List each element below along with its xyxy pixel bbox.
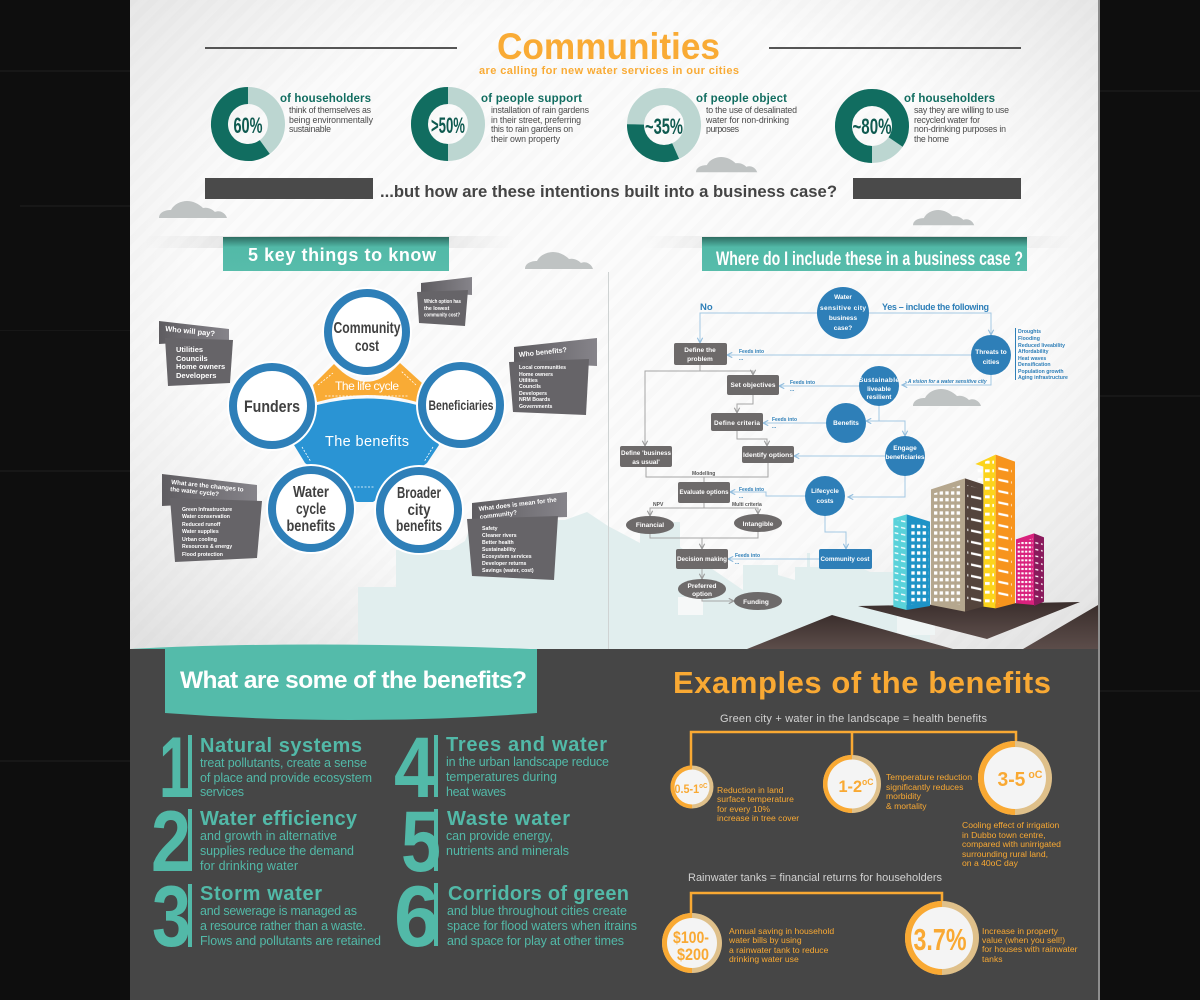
node: water cycle benefits: cycle [296, 501, 326, 518]
benefit 6: corridors of green: space for flood waters when itrains [447, 919, 637, 933]
ellipse: funding [734, 592, 782, 610]
benefit 5: waste water: can provide energy, [446, 829, 553, 843]
example: 1-2oC: & mortality [886, 801, 927, 811]
ellipse: funding: Funding [743, 599, 769, 606]
example: $100-$200: water bills by using [728, 935, 802, 945]
box: community cost [819, 549, 872, 569]
example: $100-$200: a rainwater tank to reduce [729, 945, 829, 955]
heading: examples of the benefits: Examples of the benefits [673, 665, 1051, 700]
heading: 5 key things to know [145, 236, 515, 271]
box: define criteria [711, 413, 763, 431]
stat: 60% of householders: sustainable [289, 124, 331, 134]
callout: which option [417, 277, 472, 326]
benefit 2: water efficiency: and growth in alternative [200, 829, 337, 843]
example: 0.5-1oC: surface temperature [717, 794, 794, 804]
box: evaluate options: Evaluate options [680, 489, 729, 496]
stat: ~80% of householders: say they are willing to use [914, 105, 1009, 115]
node: water sensitive city: Water [834, 294, 852, 301]
box: business as usual [620, 446, 672, 467]
stat: >50% of people support: this to rain gardens on [491, 124, 573, 134]
feeds-into labels: Modelling [692, 471, 715, 477]
node: threats [971, 335, 1011, 375]
callout: which option: the lowest [424, 306, 450, 312]
feeds-into labels: ... [739, 356, 744, 362]
callout: what it means: Savings (water, cost) [482, 568, 534, 574]
node: sustainable: Sustainable [859, 377, 899, 384]
node: water cycle benefits [266, 464, 356, 554]
example: 1-2oC: significantly reduces [886, 782, 963, 792]
callout: what it means: Sustainability [482, 547, 516, 553]
callout: who will pay: Developers [176, 371, 216, 380]
stat: ~35% of people object: water for non-drinking [705, 115, 789, 125]
example: 3.7%: tanks [982, 954, 1003, 964]
skyline backdrop [358, 512, 935, 649]
box: evaluate options [678, 482, 730, 503]
box: decision making: Decision making [677, 556, 727, 563]
feeds-into labels: Feeds into [739, 349, 764, 355]
example: 3-5oC: oC [1025, 769, 1043, 781]
benefits segment [294, 398, 439, 502]
icon: cloud [913, 210, 974, 225]
feeds-into labels: Feeds into [735, 553, 760, 559]
example: 3.7%: 3.7% [914, 922, 966, 957]
benefit 4: trees and water: 4 [394, 720, 435, 816]
example: 0.5-1oC: for every 10% [717, 804, 770, 814]
benefit 5: waste water: Waste water [447, 808, 570, 830]
node: broader city benefits: benefits [396, 518, 442, 535]
example: 3-5oC: Cooling effect of irrigation [962, 820, 1060, 830]
stat: ~80% of householders: of householders [904, 93, 995, 105]
stat: >50% of people support: of people support [481, 93, 582, 105]
stat: ~80% of householders [844, 93, 1009, 154]
benefit 1: natural systems: of place and provide ecosystem [200, 771, 372, 785]
callout: what it means: Cleaner rivers [482, 533, 517, 539]
question banner [205, 178, 1021, 201]
node: threats: Threats to [975, 349, 1007, 356]
benefit 6: corridors of green: 6 [394, 869, 440, 965]
node: community cost: cost [355, 338, 379, 355]
label: yes: Yes – include the following [882, 302, 989, 312]
example: 3.7%: for houses with rainwater [982, 944, 1078, 954]
callout: which option: community cost? [424, 312, 460, 318]
benefit 3: storm water: Flows and pollutants are retained [200, 934, 381, 948]
banner: what are some of the benefits [130, 644, 537, 720]
node: water cycle benefits: Water [293, 484, 329, 501]
node: water sensitive city: business [829, 315, 857, 322]
box: define the problem [674, 343, 727, 365]
box: identify options [742, 446, 794, 463]
node: benefits: Benefits [833, 420, 859, 427]
heading: where do I include these: Where do I include these in a business case ? [716, 249, 1023, 270]
benefit 3: storm water: and sewerage is managed as [200, 904, 357, 918]
example: 3.7%: value (when you sell!) [982, 935, 1065, 945]
title: Communities: are calling for new water services in our cities [479, 65, 739, 77]
node: engage: Engage [893, 445, 917, 452]
callout: water cycle changes: Water supplies [182, 529, 219, 535]
banner: what are some of the benefits: What are some of the benefits? [180, 667, 527, 694]
benefit 6: corridors of green: and space for play at other times [447, 934, 624, 948]
callout: who will pay: Home owners [176, 362, 225, 371]
label: no: No [700, 302, 713, 313]
benefit 6: corridors of green: Corridors of green [448, 883, 629, 905]
stat: ~35% of people object [626, 87, 797, 163]
callout: who benefits: NRM Boards [519, 397, 550, 403]
benefit 4: trees and water [394, 720, 609, 816]
stat: 60% of householders: 60% [234, 113, 262, 138]
callout: water cycle changes: Green Infrastructure [182, 507, 232, 513]
feeds-into labels: Feeds into [739, 487, 764, 493]
flowchart [620, 287, 1068, 610]
example: $100-$200 [662, 913, 834, 973]
stat: >50% of people support: their own property [491, 134, 561, 144]
note: vision: - A vision for a water sensitive city [905, 379, 987, 385]
stat: ~35% of people object: of people object [696, 93, 787, 105]
box: define the problem: Define the [684, 347, 716, 354]
example: 1-2oC [823, 755, 972, 813]
list: threats: Droughts [1018, 329, 1041, 335]
node: community cost: Community [334, 320, 401, 337]
callout: who benefits: Councils [519, 384, 541, 390]
callout: what it means: Developer returns [482, 561, 527, 567]
callout: who will pay: Councils [176, 354, 208, 363]
list: threats: Reduced liveability [1018, 343, 1065, 349]
example: $100-$200: drinking water use [729, 954, 799, 964]
benefit 2: water efficiency: Water efficiency [200, 808, 358, 830]
callout: who benefits: Local communities [519, 365, 566, 371]
connectors [700, 313, 991, 559]
box: identify options: Identify options [743, 452, 793, 459]
stat: ~80% of householders: non-drinking purposes in [914, 124, 1006, 134]
stat: ~80% of householders: recycled water for [914, 115, 980, 125]
example: 1-2oC: Temperature reduction [886, 772, 972, 782]
stat: >50% of people support: >50% [431, 113, 465, 138]
benefit 6: corridors of green [394, 869, 637, 965]
benefit 4: trees and water: in the urban landscape reduce [446, 755, 609, 769]
feeds-into labels: Feeds into [790, 380, 815, 386]
node: water sensitive city [817, 287, 869, 339]
benefit 3: storm water: Storm water [200, 883, 322, 905]
callout: who benefits: Utilities [519, 378, 538, 384]
benefit 1: natural systems: treat pollutants, create a sense [200, 756, 367, 770]
callout: which option: Which option has [424, 299, 461, 305]
list: threats: Flooding [1018, 336, 1040, 342]
node: sustainable: resilient [867, 394, 892, 401]
stat: 60% of householders: think of themselves as [289, 105, 372, 115]
stat: 60% of householders [208, 84, 374, 164]
benefit 6: corridors of green: and blue throughout cities create [447, 904, 627, 918]
example: 3-5oC: in Dubbo town centre, [962, 830, 1046, 840]
illustration: buildings [747, 455, 1098, 649]
callout: who will pay: Utilities [176, 345, 203, 354]
example: 3-5oC [962, 741, 1061, 868]
benefit 1: natural systems: services [200, 785, 244, 799]
callout: what it means: Safety [482, 526, 498, 532]
benefit 5: waste water [401, 794, 570, 890]
benefit 4: trees and water: Trees and water [446, 734, 607, 756]
example: 3-5oC: on a 40oC day [962, 858, 1019, 868]
node: water sensitive city: case? [834, 325, 852, 332]
benefit 3: storm water [152, 869, 381, 965]
life cycle segment [313, 363, 422, 402]
life cycle segment: The life cycle [335, 379, 399, 393]
node: engage [885, 436, 925, 476]
ellipse: preferred option [678, 579, 726, 599]
callout: who benefits [509, 338, 597, 415]
ellipse: preferred option: option [692, 591, 712, 598]
callout: water cycle changes: Resources & energy [182, 544, 232, 550]
stat: ~35% of people object: to the use of desalinated [706, 105, 797, 115]
list: threats: Densification [1018, 362, 1051, 368]
stat: ~80% of householders: the home [914, 134, 949, 144]
example: 3.7% [905, 901, 1078, 975]
benefit 4: trees and water: heat waves [446, 785, 506, 799]
node: water sensitive city: sensitive city [820, 305, 866, 312]
box: community cost: Community cost [820, 556, 870, 563]
example: $100-$200: Annual saving in household [729, 926, 834, 936]
stat: >50% of people support [420, 93, 590, 152]
list: threats: Heat waves [1018, 356, 1046, 362]
feeds-into labels: ... [790, 387, 795, 393]
callout: what it means: Better health [482, 540, 514, 546]
node: water cycle benefits: benefits [286, 518, 336, 535]
list: threats [1015, 328, 1068, 381]
stat: 60% of householders: of householders [280, 93, 371, 105]
node: engage: beneficiaries [886, 454, 925, 461]
icon: cloud [696, 157, 757, 172]
example: 0.5-1oC [670, 766, 799, 823]
example: 0.5-1oC: oC [699, 783, 708, 790]
node: sustainable [859, 366, 899, 406]
callout: who will pay: Who will pay? [165, 324, 216, 338]
callout: water cycle changes: What are the changes to [171, 479, 244, 494]
feeds-into labels [653, 349, 815, 566]
box: set objectives [727, 375, 779, 395]
icon: cloud [159, 201, 227, 218]
node: benefits [826, 403, 866, 443]
example: 3.7%: Increase in property [982, 926, 1059, 936]
node: beneficiaries: Beneficiaries [428, 397, 494, 413]
feeds-into labels: Feeds into [772, 417, 797, 423]
benefit 2: water efficiency: supplies reduce the demand [200, 844, 354, 858]
feeds-into labels: ... [739, 494, 744, 500]
callout: water cycle changes: Urban cooling [182, 537, 217, 543]
stat: 60% of householders: being environmentally [289, 115, 374, 125]
feeds-into labels: NPV [653, 502, 664, 508]
node: lifecycle [805, 476, 845, 516]
node: broader city benefits: Broader [397, 485, 441, 502]
icon: cloud [525, 252, 593, 269]
benefit 5: waste water: nutrients and minerals [446, 844, 569, 858]
example: 1-2oC: 1-2 [838, 777, 863, 796]
ellipse: financial: Financial [636, 522, 664, 529]
benefit 1: natural systems [159, 720, 372, 816]
node: funders: Funders [244, 397, 300, 416]
stat: ~35% of people object: ~35% [645, 114, 683, 139]
feeds-into labels: Multi criteria [732, 502, 762, 508]
callout: what it means: Ecosystem services [482, 554, 532, 560]
stat: ~80% of householders: ~80% [852, 114, 892, 139]
ellipse: preferred option: Preferred [688, 583, 716, 590]
node: threats: cities [983, 359, 1000, 366]
connector: rainwater tree [691, 893, 942, 913]
example: 3-5oC: 3-5 [998, 769, 1026, 791]
box: decision making [676, 549, 728, 569]
benefit 1: natural systems: Natural systems [200, 735, 362, 757]
example: 0.5-1oC: Reduction in land [717, 785, 784, 795]
example: 0.5-1oC: 0.5-1 [674, 782, 702, 796]
box: define the problem: problem [687, 356, 713, 363]
list: threats: Affordability [1018, 349, 1049, 355]
benefit 2: water efficiency: 2 [151, 794, 191, 890]
node: beneficiaries [416, 360, 506, 450]
node: community cost [322, 287, 412, 377]
box: define criteria: Define criteria [714, 420, 760, 427]
node: lifecycle: costs [817, 498, 834, 505]
connector: health benefits tree [691, 732, 1016, 767]
panel: dark lower section [130, 649, 1098, 1000]
benefits segment: The benefits [325, 434, 409, 450]
node: lifecycle: Lifecycle [811, 488, 839, 495]
heading: green city: Green city + water in the landscape = health benefits [720, 713, 988, 725]
example: 1-2oC: oC [862, 777, 874, 787]
title: Communities: Communities [497, 26, 720, 67]
example: $100-$200: $100- [673, 928, 709, 947]
callout: what it means: community? [479, 509, 518, 521]
example: $100-$200: $200 [677, 945, 709, 964]
ellipse: intangible [734, 514, 782, 532]
callout: what it means [467, 492, 567, 580]
ellipse: intangible: Intangible [743, 521, 774, 528]
callout: what it means: What does is mean for the [478, 496, 558, 513]
callout: who will pay [159, 321, 233, 386]
benefit 2: water efficiency: for drinking water [200, 859, 298, 873]
stat: >50% of people support: installation of rain gardens [491, 105, 590, 115]
callout: water cycle changes: the water cycle? [170, 486, 219, 498]
node: sustainable: liveable [867, 386, 891, 393]
diagram: five key things [227, 287, 506, 555]
benefit 3: storm water: a resource rather than a waste. [200, 919, 366, 933]
stat: ~35% of people object: purposes [706, 124, 740, 134]
heading: 5 key things to know: 5 key things to know [248, 245, 437, 265]
heading: where do I include these [643, 236, 1075, 271]
callout: who benefits: Home owners [519, 372, 553, 378]
callout: who benefits: Developers [519, 391, 547, 397]
node: funders [227, 361, 317, 451]
question banner: ...but how are these intentions built into a business case? [380, 182, 837, 201]
callout: water cycle changes [162, 474, 262, 562]
callout: who benefits: Who benefits? [518, 347, 567, 359]
title: Communities [205, 26, 1021, 77]
feeds-into labels: ... [735, 560, 740, 566]
callout: water cycle changes: Water conservation [182, 514, 230, 520]
callout: water cycle changes: Flood protection [182, 552, 223, 558]
callout: who benefits: Governments [519, 404, 553, 410]
benefit 3: storm water: 3 [152, 869, 191, 965]
node: broader city benefits: city [408, 502, 431, 519]
box: set objectives: Set objectives [730, 382, 776, 389]
heading: rainwater tanks: Rainwater tanks = financial returns for householders [688, 872, 942, 884]
benefit 5: waste water: 5 [401, 794, 441, 890]
callout: water cycle changes: Reduced runoff [182, 522, 221, 528]
ellipse: financial [626, 516, 674, 534]
example: 0.5-1oC: increase in tree cover [717, 813, 799, 823]
example: 1-2oC: morbidity [886, 791, 922, 801]
benefit 2: water efficiency [151, 794, 358, 890]
example: 3-5oC: surrounding rural land, [962, 849, 1048, 859]
box: business as usual: as usual' [632, 459, 660, 466]
node: broader city benefits [374, 465, 464, 555]
feeds-into labels: ... [772, 424, 777, 430]
example: 3-5oC: compared with unirrigated [962, 839, 1061, 849]
box: business as usual: Define 'business [621, 450, 671, 457]
stat: >50% of people support: in their street, preferring [491, 115, 581, 125]
list: threats: Population growth [1018, 369, 1064, 375]
benefit 1: natural systems: 1 [159, 720, 191, 816]
icon: cloud [913, 389, 981, 406]
list: threats: Aging infrastructure [1018, 375, 1068, 381]
benefit 4: trees and water: temperatures during [446, 770, 557, 784]
